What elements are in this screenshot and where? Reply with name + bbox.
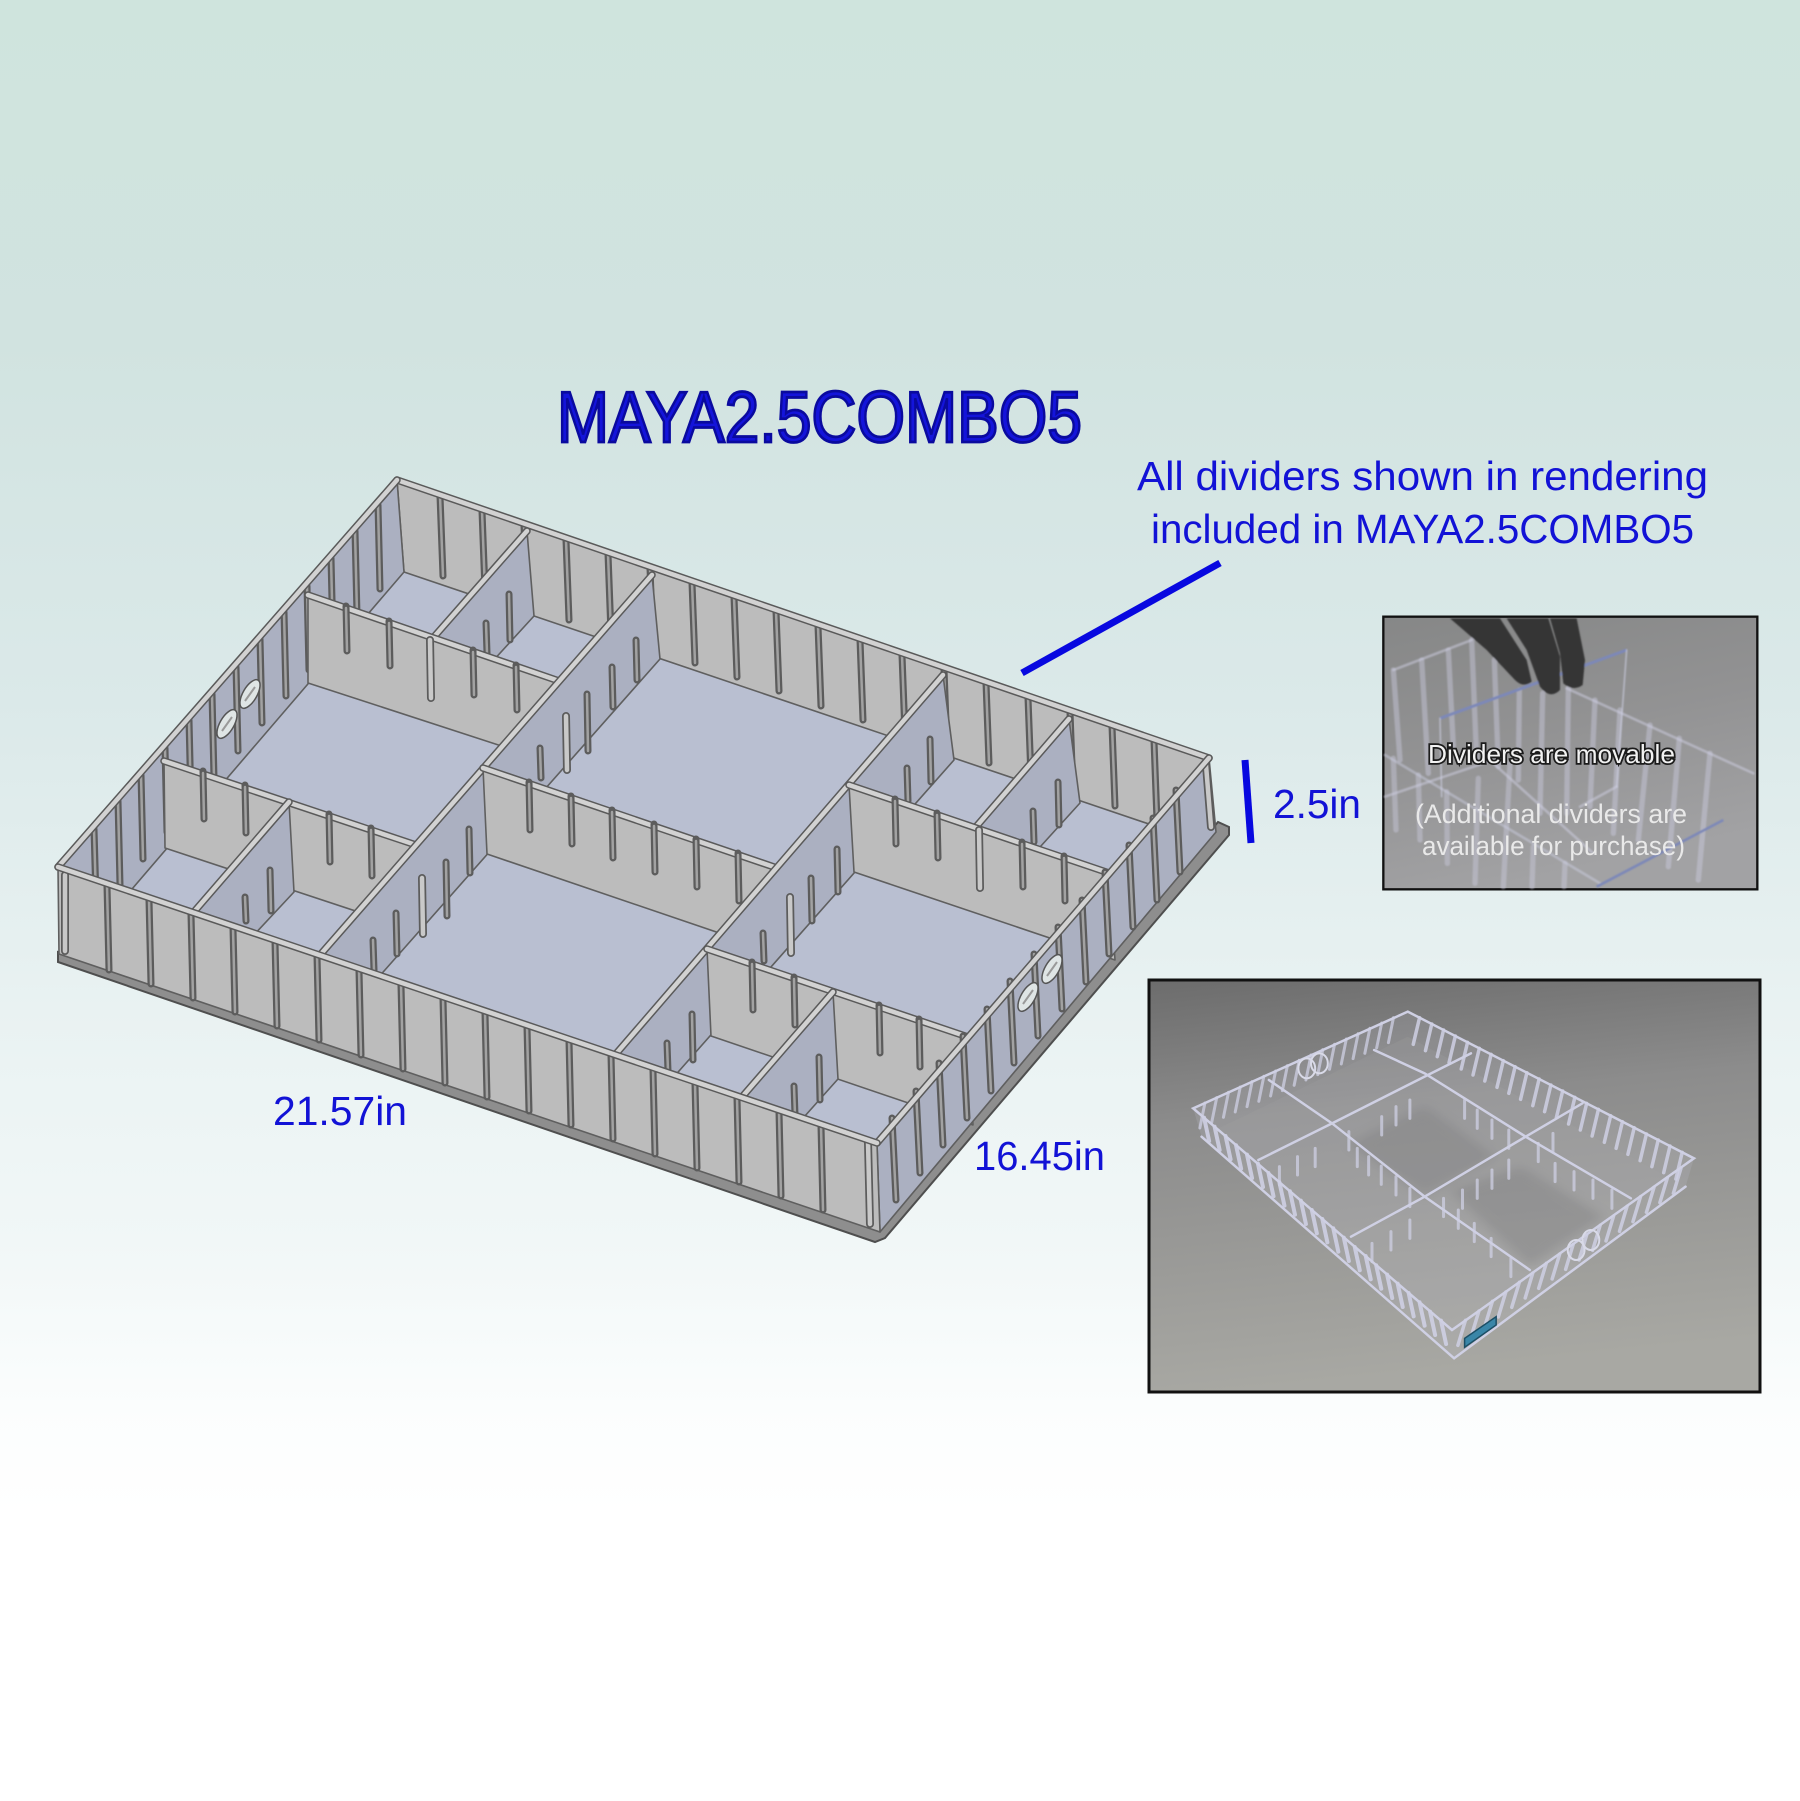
cross divider lower left [164, 761, 419, 932]
dimension: length: 21.57in [273, 1088, 407, 1134]
icon: gloved fingers [1450, 618, 1585, 694]
height marker [1245, 760, 1251, 843]
callout text [1137, 453, 1708, 552]
icon: blue logo label [1465, 1317, 1496, 1347]
panel: tray photo [1149, 980, 1760, 1392]
callout text: included in MAYA2.5COMBO5 [1151, 506, 1694, 552]
panel: dividers photo [1383, 617, 1757, 889]
back and side rims [1385, 640, 1753, 853]
back wall bars [1393, 640, 1710, 880]
wall bars [1204, 1118, 1446, 1344]
divider slots [1279, 1100, 1612, 1277]
short divider front right [742, 992, 838, 1183]
cross divider center [483, 768, 781, 954]
panel text: additional dividers [1415, 799, 1687, 861]
panel text: additional dividers: available for purchase) [1422, 831, 1685, 861]
wall glass [1193, 1012, 1694, 1358]
held divider edge [1440, 650, 1627, 718]
dimension: width: 16.45in [974, 1133, 1105, 1179]
callout text: All dividers shown in rendering [1137, 453, 1708, 499]
long divider left [320, 575, 660, 1040]
tray rendering [58, 480, 1229, 1242]
photo contents [1385, 618, 1753, 887]
short divider back right [975, 719, 1080, 912]
title: MAYA2.5COMBO5 [557, 378, 1082, 458]
icon: finger holes [1298, 1053, 1599, 1260]
short divider front left [193, 802, 294, 998]
panel text: movable: Dividers are movable [1428, 739, 1675, 769]
base plate edge [1202, 1137, 1686, 1358]
cross divider lower right [707, 949, 973, 1125]
floor glass [1202, 1037, 1686, 1358]
tray rim [1193, 1012, 1694, 1330]
floor [59, 572, 1205, 1229]
base plate [58, 822, 1229, 1242]
short divider back left [433, 531, 534, 722]
panel text: additional dividers: (Additional dividers are [1415, 799, 1687, 829]
front wall [58, 867, 880, 1232]
compartment shading [1349, 1107, 1603, 1267]
front divider bars [1393, 758, 1565, 887]
back wall [397, 480, 1209, 843]
long divider right [615, 675, 954, 1140]
cross divider upper left [308, 595, 563, 766]
right wall [877, 758, 1216, 1232]
dimension: height: 2.5in [1273, 781, 1361, 827]
dividers [1258, 1050, 1631, 1270]
icon: finger holes in left wall [213, 677, 264, 741]
cross divider upper right [849, 785, 1115, 960]
callout leader line [1022, 563, 1220, 673]
left wall [58, 480, 404, 903]
icon: finger holes in right wall [1014, 952, 1066, 1014]
